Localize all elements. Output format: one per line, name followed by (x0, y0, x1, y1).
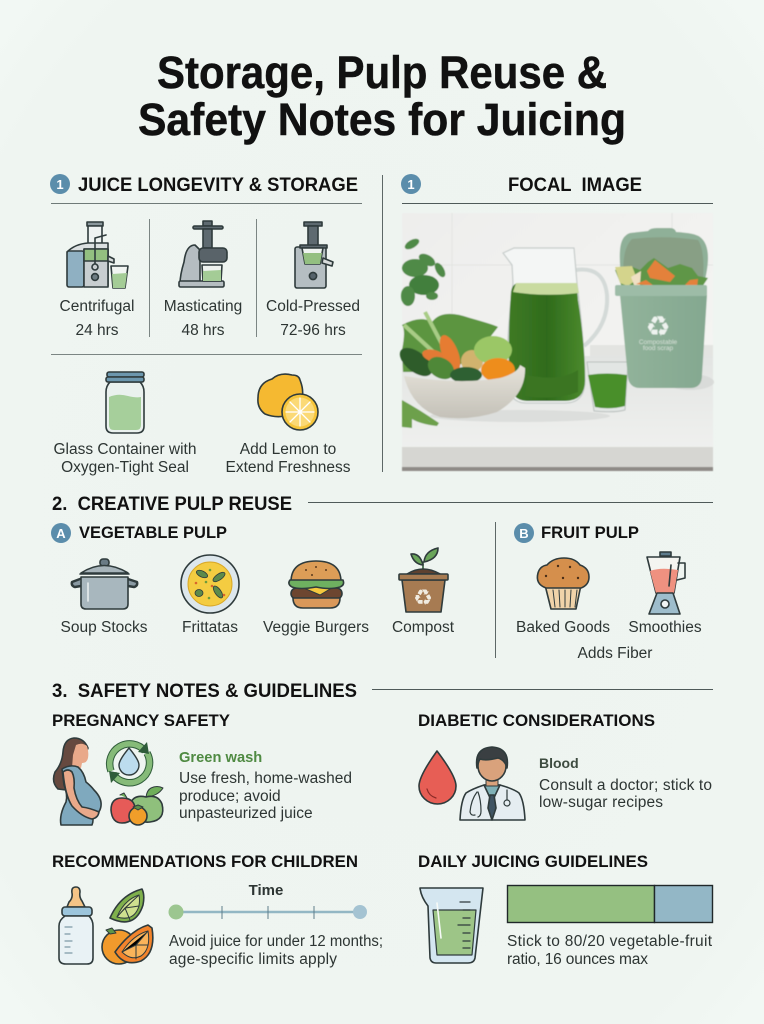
label: add lemon (226, 441, 351, 476)
icon: measuring cup (420, 888, 483, 963)
label: baked goods: Baked Goods (516, 619, 610, 636)
icon: glass jar (106, 372, 144, 433)
timeline chart: Time (249, 882, 283, 899)
panel: fruit pulp (514, 523, 702, 662)
icon: water recycle (109, 742, 150, 783)
compost bin (620, 228, 708, 284)
panel: recommendations for children (52, 853, 383, 968)
heading: pregnancy safety: PREGNANCY SAFETY (52, 712, 230, 730)
heading: diabetic considerations: DIABETIC CONSIDERATIONS (418, 712, 655, 730)
icon: soup pot (72, 559, 137, 609)
heading: fruit pulp: FRUIT PULP (541, 524, 639, 542)
text: green wash: Use fresh, home-washed (179, 770, 352, 787)
bowl contents (402, 314, 498, 372)
label: cold-pressed (266, 298, 360, 339)
icon: fruits (111, 786, 163, 825)
icon: masticating juicer (179, 221, 227, 287)
text: blood (539, 755, 712, 811)
photo: juice pitcher, vegetables and compost bin (395, 213, 714, 471)
label: soup stocks: Soup Stocks (60, 619, 148, 636)
label: frittatas: Frittatas (182, 619, 238, 636)
icon: lemon (258, 374, 318, 430)
title: Storage, Pulp Reuse & (157, 47, 607, 98)
timeline chart (168, 882, 367, 920)
heading: daily juicing guidelines: DAILY JUICING GUIDELINES (418, 853, 648, 871)
text: green wash: unpasteurized juice (179, 805, 313, 822)
label: add lemon: Extend Freshness (226, 459, 351, 476)
label: masticating: Masticating (164, 298, 242, 315)
panel: vegetable pulp (51, 523, 455, 636)
panel: juice longevity and storage (50, 174, 382, 476)
label: centrifugal (60, 298, 134, 339)
heading: focal image: 1 (407, 177, 415, 192)
icon: muffin (537, 558, 589, 609)
label: cold-pressed: Cold-Pressed (266, 298, 360, 315)
label: masticating (164, 298, 242, 339)
heading: safety notes: 3. SAFETY NOTES & GUIDELINES (52, 681, 357, 702)
icon: frittata (181, 555, 239, 613)
bowl (404, 365, 525, 418)
label: masticating: 48 hrs (181, 322, 225, 339)
heading: vegetable pulp: A (56, 526, 66, 541)
text: ratio advice: ratio, 16 ounces max (507, 951, 648, 968)
recycle mark and bin label: Compostable (639, 339, 678, 346)
heading: juice longevity: 1 (56, 177, 64, 192)
label: glass container: Glass Container with (53, 441, 197, 458)
icon: blood drop (419, 751, 456, 804)
label: glass container: Oxygen-Tight Seal (61, 459, 189, 476)
title: Safety Notes for Juicing (138, 94, 626, 145)
icon: compost pot (399, 548, 448, 612)
icon: baby bottle (59, 887, 93, 964)
text: green wash (179, 750, 352, 822)
icon: pregnant woman (54, 738, 101, 825)
text: blood: low-sugar recipes (539, 794, 663, 811)
heading: vegetable pulp: VEGETABLE PULP (79, 524, 227, 542)
heading: recommendations for children: RECOMMENDATIONS FOR CHILDREN (52, 853, 358, 871)
heading: juice longevity: JUICE LONGEVITY & STORAGE (78, 175, 358, 196)
heading: fruit pulp: B (519, 526, 529, 541)
icon: oranges (102, 925, 153, 964)
icon: compost pot: ♻ (413, 586, 433, 611)
text: children advice (169, 933, 383, 968)
label: centrifugal: Centrifugal (60, 298, 134, 315)
label: compost: Compost (392, 619, 455, 636)
chart: 80/20 ratio bar (508, 886, 712, 922)
label: smoothies: Smoothies (628, 619, 702, 636)
recycle mark and bin label: ♻ (645, 310, 671, 343)
icon: veggie burger (289, 561, 344, 608)
text: green wash: produce; avoid (179, 788, 281, 805)
icon: centrifugal juicer (67, 222, 128, 288)
text: ratio advice (507, 933, 713, 968)
label: glass container (53, 441, 197, 476)
heading: focal image (401, 174, 642, 196)
label: veggie burgers: Veggie Burgers (263, 619, 369, 636)
text: children advice: age-specific limits apply (169, 951, 337, 968)
heading: focal image: FOCAL IMAGE (508, 175, 642, 196)
panel: diabetic considerations (418, 712, 712, 820)
plant (401, 237, 447, 306)
text: green wash: Green wash (179, 750, 262, 766)
text: blood: Blood (539, 755, 579, 771)
label: cold-pressed: 72-96 hrs (280, 322, 346, 339)
icon: lime (110, 889, 144, 922)
heading: fruit pulp (514, 523, 639, 543)
icon: blender (647, 552, 685, 614)
icon: cold-pressed juicer (295, 222, 333, 288)
label: adds fiber: Adds Fiber (578, 645, 652, 662)
text: ratio advice: Stick to 80/20 vegetable-fruit (507, 933, 713, 950)
pitcher (576, 270, 607, 346)
icon: doctor (460, 747, 525, 820)
title (138, 47, 626, 145)
label: centrifugal: 24 hrs (75, 322, 119, 339)
panel: focal image (395, 174, 714, 471)
label: add lemon: Add Lemon to (240, 441, 336, 458)
text: blood: Consult a doctor; stick to (539, 777, 712, 794)
recycle mark and bin label (639, 310, 678, 352)
glass (587, 362, 628, 412)
heading: creative pulp reuse: 2. CREATIVE PULP REUSE (52, 494, 292, 515)
panel: pregnancy safety (52, 712, 352, 825)
text: children advice: Avoid juice for under 12 months; (169, 933, 383, 950)
panel: daily juicing guidelines (418, 853, 713, 968)
recycle mark and bin label: food scrap (643, 345, 674, 352)
